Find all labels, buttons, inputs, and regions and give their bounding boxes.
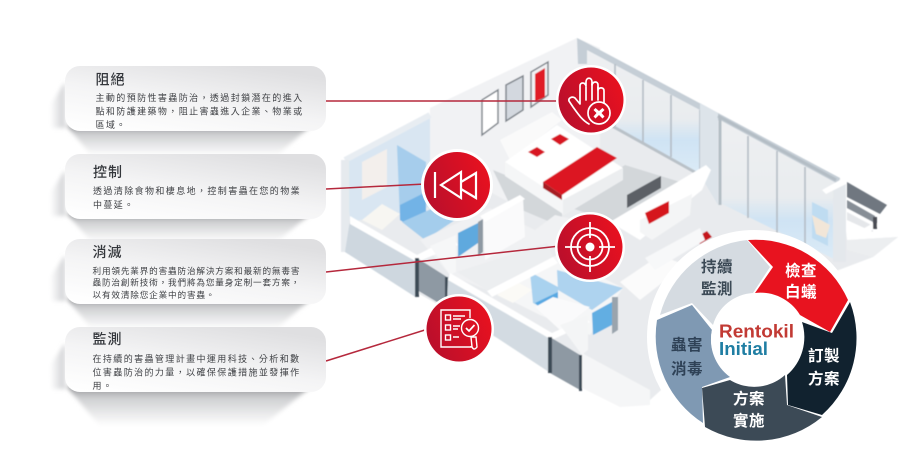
- segment: 檢查白蟻: 白蟻: [785, 283, 817, 301]
- segment: 方案實施: [702, 375, 822, 441]
- segment: 持續監測: 持續: [701, 257, 733, 276]
- logo: Rentokil Initial: [711, 295, 799, 383]
- front door two: [548, 337, 582, 391]
- front wall segment two: [447, 276, 552, 374]
- panel: 阻絕: [65, 66, 326, 131]
- terrace: [847, 182, 898, 257]
- wall top edge: [577, 38, 840, 184]
- corridor floor: [457, 243, 553, 290]
- window wall two: [718, 116, 836, 262]
- icon: target: [555, 212, 625, 282]
- logo: Rentokil Initial: Rentokil: [719, 320, 794, 342]
- text: 監測 description: 用。: [92, 381, 113, 391]
- panel shadows: [50, 82, 312, 426]
- window wall one: [587, 50, 700, 175]
- bedroom floor grey: [493, 165, 690, 228]
- text: 控制 description: 中蔓延。: [93, 199, 135, 210]
- text: 監測 description: 位害蟲防治的力量，以確保保護措施並發揮作: [92, 366, 301, 378]
- segment: 訂製方案: 方案: [808, 369, 840, 388]
- text: 控制 description: 透過清除食物和棲息地，控制害蟲在您的物業: [93, 185, 301, 196]
- process wheel: [647, 230, 861, 444]
- front door one: [415, 258, 448, 308]
- front wall segment three: [582, 353, 650, 407]
- corner pillar: [833, 184, 846, 262]
- front wall segment one: [345, 220, 417, 298]
- text: 消滅 description: 蟲防治創新技術，我們將為您量身定制一套方案，: [92, 276, 300, 288]
- text: 阻絕 description: 主動的預防性害蟲防治，透過封鎖潛在的進入: [96, 92, 304, 103]
- bathroom two: [490, 255, 623, 335]
- back wall: bedroom: [430, 38, 600, 215]
- interior wall right: [487, 257, 558, 297]
- segment: 蟲害消毒: 消毒: [671, 359, 703, 378]
- bathroom one: [345, 115, 455, 252]
- icon: checklist with magnifier: [424, 294, 494, 364]
- interior block walls: [420, 208, 610, 290]
- connector line: eliminate: [326, 246, 560, 272]
- segment: 訂製方案: 訂製: [808, 346, 840, 365]
- text: 消滅 description: 以有效清除您企業中的害蟲。: [92, 289, 215, 300]
- segment: 檢查白蟻: 檢查: [785, 261, 817, 280]
- connector line: monitor: [326, 329, 428, 361]
- panel: 監測: [65, 327, 326, 392]
- icon: rewind: [421, 149, 493, 221]
- segment: 蟲害消毒: 蟲害: [671, 335, 703, 354]
- text: 阻絕 description: 區域。: [96, 119, 127, 130]
- segment: 方案實施: 方案: [733, 389, 765, 408]
- connector line: block: [326, 100, 560, 102]
- segment: 蟲害消毒: [656, 305, 730, 423]
- segment: 持續監測: [660, 240, 770, 325]
- entry box one: [430, 235, 456, 275]
- icon: hand with cross: [556, 65, 626, 135]
- tv unit: [627, 176, 661, 208]
- segment: 檢查白蟻: [748, 240, 848, 332]
- building base floor: [345, 40, 898, 400]
- blue door glass one: [458, 223, 478, 257]
- logo: Rentokil Initial: Initial: [719, 338, 768, 359]
- bed: [500, 112, 623, 216]
- bedroom partition: [610, 165, 711, 240]
- segment: 方案實施: 實施: [733, 411, 765, 430]
- text: 消滅 description: 利用領先業界的害蟲防治解決方案和最新的無毒害: [92, 265, 300, 276]
- panel: 控制: [65, 154, 326, 219]
- panel: 消滅: [65, 239, 326, 304]
- heading: 監測: 監測: [92, 331, 122, 347]
- rug and table: [695, 231, 712, 244]
- segment: 訂製方案: [787, 302, 857, 415]
- heading: 控制: 控制: [93, 164, 123, 180]
- entry box two: [560, 315, 588, 355]
- text: 阻絕 description: 點和防護建築物，阻止害蟲進入企業、物業或: [96, 106, 304, 116]
- heading: 阻絕: 阻絕: [96, 72, 126, 88]
- pillar between windows: [700, 103, 718, 205]
- connector line: control: [326, 184, 425, 189]
- wall pictures: [482, 62, 548, 135]
- text: 監測 description: 在持續的害蟲管理計畫中運用科技、分析和數: [92, 353, 301, 364]
- isometric floor plan illustration: [345, 38, 898, 407]
- segment: 持續監測: 監測: [701, 280, 733, 298]
- sofa: [640, 194, 692, 240]
- heading: 消滅: 消滅: [92, 244, 122, 260]
